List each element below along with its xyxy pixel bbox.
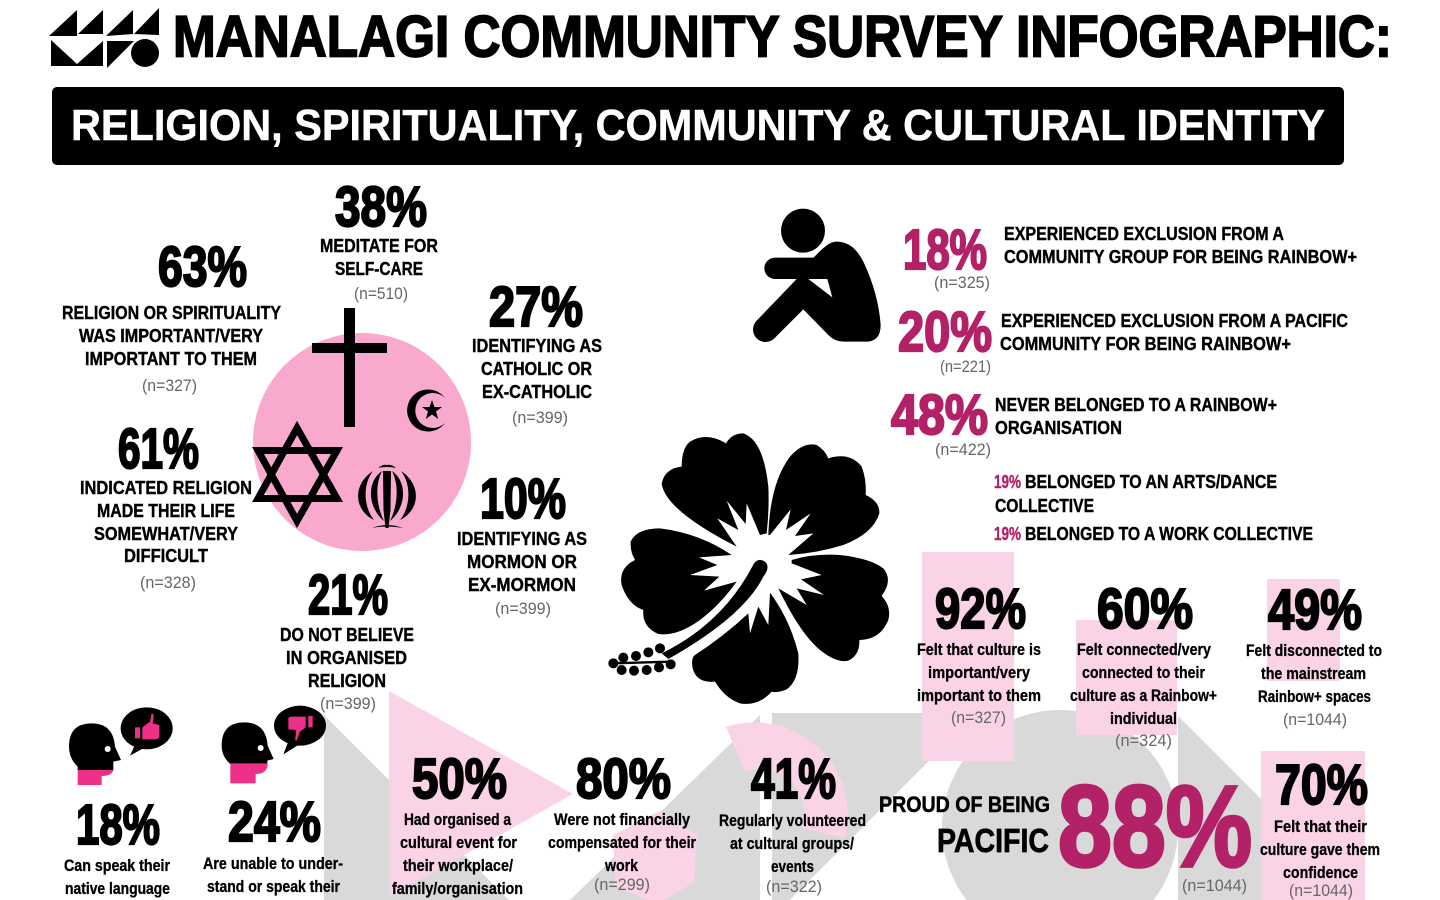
icon: head with thumbs down speech bubble — [222, 706, 326, 783]
stat: 27% catholic: EX-CATHOLIC — [482, 381, 592, 402]
stat: 61% religion difficult: 61% — [118, 417, 199, 481]
stat: 27% catholic: 27% — [489, 275, 583, 339]
stat: 27% catholic: IDENTIFYING AS — [472, 335, 602, 356]
stat: 48% never belonged — [891, 383, 1277, 459]
icon: hibiscus flower — [608, 433, 889, 704]
stat: 92% culture important: important to them — [917, 687, 1041, 705]
stat: 61% religion difficult: MADE THEIR LIFE — [97, 500, 235, 521]
stat: 49% disconnected from Rainbow+ spaces: the mainstream — [1261, 665, 1366, 683]
stat: 19% arts and work collectives: COLLECTIVE — [995, 495, 1094, 516]
stat: 18% excluded from community group: EXPERIENCED EXCLUSION FROM A — [1004, 223, 1284, 244]
stat: 70% culture gave confidence — [1260, 753, 1380, 900]
stat: 80% not compensated: compensated for their — [548, 834, 696, 852]
stat: 80% not compensated: Were not financially — [554, 811, 691, 829]
stat: 20% excluded from Pacific community: COMMUNITY FOR BEING RAINBOW+ — [1000, 333, 1291, 354]
stat: 24% unable to understand or speak: 24% — [228, 790, 321, 854]
stat: 63% religion important — [62, 235, 282, 395]
stat: 61% religion difficult: (n=328) — [140, 573, 196, 592]
stat: 70% culture gave confidence: (n=1044) — [1289, 881, 1353, 900]
stat: 92% culture important: Felt that culture is — [917, 641, 1041, 659]
icon: head with thumbs up speech bubble — [69, 707, 173, 785]
stat: 38% meditate: 38% — [335, 175, 427, 239]
stat: 60% connected to culture: culture as a Rainbow+ — [1070, 687, 1217, 705]
stat: 24% unable to understand or speak: Are unable to under- — [203, 855, 343, 873]
stat: 49% disconnected from Rainbow+ spaces: Felt disconnected to — [1246, 642, 1382, 660]
stat: 10% mormon: EX-MORMON — [468, 574, 576, 595]
stat: 18% speak native language: 18% — [76, 793, 160, 857]
subtitle banner: RELIGION, SPIRITUALITY, COMMUNITY & CULTURAL IDENTITY — [71, 101, 1325, 150]
stat: 20% excluded from Pacific community — [898, 300, 1348, 376]
stat: 27% catholic: (n=399) — [512, 408, 568, 427]
stat: 27% catholic: CATHOLIC OR — [481, 358, 592, 379]
stat: 49% disconnected from Rainbow+ spaces: 49% — [1268, 578, 1362, 642]
stat: 92% culture important: (n=327) — [951, 708, 1006, 727]
stat: 38% meditate: (n=510) — [354, 284, 408, 303]
stat: 18% speak native language: native language — [65, 880, 170, 898]
stat: 19% arts and work collectives — [994, 471, 1313, 544]
stat: 21% no organised religion: (n=399) — [320, 694, 376, 713]
stat: 63% religion important: (n=327) — [142, 376, 197, 395]
stat: 41% volunteered: events — [771, 858, 814, 876]
stat: 21% no organised religion: RELIGION — [308, 670, 386, 691]
stat: 18% speak native language — [64, 793, 170, 898]
stat: 27% catholic — [472, 275, 602, 427]
stat: 49% disconnected from Rainbow+ spaces: (n=1044) — [1283, 710, 1347, 729]
stat: 10% mormon: (n=399) — [495, 599, 551, 618]
stat: 21% no organised religion — [280, 563, 414, 713]
stat: 19% arts and work collectives: 19% — [994, 471, 1021, 492]
stat: 61% religion difficult: INDICATED RELIGION — [80, 477, 252, 498]
stat: 60% connected to culture: individual — [1110, 710, 1177, 728]
stat: 63% religion important: IMPORTANT TO THEM — [85, 348, 257, 369]
stat: 18% excluded from community group: (n=325) — [934, 273, 990, 292]
stat: 50% organised cultural event — [392, 747, 523, 898]
stat: 48% never belonged: (n=422) — [935, 440, 991, 459]
stat: 61% religion difficult — [80, 417, 252, 592]
stat: 61% religion difficult: SOMEWHAT/VERY — [94, 523, 239, 544]
stat: 48% never belonged: 48% — [891, 383, 988, 447]
stat: 19% arts and work collectives: BELONGED TO AN ARTS/DANCE — [1025, 471, 1277, 492]
stat: 10% mormon: MORMON OR — [467, 551, 577, 572]
subtitle banner — [52, 87, 1344, 165]
stat: 18% excluded from community group: 18% — [903, 218, 987, 282]
stat: 41% volunteered — [719, 747, 866, 896]
stat: 18% speak native language: Can speak their — [64, 857, 170, 875]
stat: 92% culture important — [917, 577, 1041, 727]
stat: 80% not compensated: work — [604, 857, 639, 875]
stat: 60% connected to culture — [1070, 577, 1217, 750]
stat: 50% organised cultural event: Had organised a — [404, 811, 512, 829]
stat: 49% disconnected from Rainbow+ spaces — [1246, 578, 1382, 729]
background geometric shapes — [324, 552, 1365, 900]
stat: 50% organised cultural event: cultural event for — [400, 834, 517, 852]
stat: 70% culture gave confidence: 70% — [1275, 753, 1368, 817]
stat: 50% organised cultural event: family/organisation — [392, 880, 523, 898]
stat: 38% meditate — [320, 175, 438, 303]
stat: 88% proud of being Pacific: PACIFIC — [937, 822, 1049, 859]
stat: 41% volunteered: (n=322) — [766, 877, 822, 896]
stat: 21% no organised religion: 21% — [308, 563, 388, 627]
stat: 70% culture gave confidence: Felt that their — [1274, 818, 1368, 836]
stat: 63% religion important: 63% — [158, 235, 247, 299]
stat: 41% volunteered: Regularly volunteered — [719, 812, 866, 830]
stat: 41% volunteered: 41% — [751, 747, 836, 811]
stat: 88% proud of being Pacific: (n=1044) — [1182, 876, 1247, 895]
stat: 20% excluded from Pacific community: EXPERIENCED EXCLUSION FROM A PACIFIC — [1001, 310, 1348, 331]
stat: 70% culture gave confidence: confidence — [1283, 864, 1358, 882]
stat: 20% excluded from Pacific community: 20% — [898, 300, 992, 364]
icon: Manalagi logo — [49, 8, 159, 68]
stat: 48% never belonged: NEVER BELONGED TO A RAINBOW+ — [995, 394, 1277, 415]
stat: 60% connected to culture: 60% — [1097, 577, 1193, 641]
stat: 19% arts and work collectives: 19% — [994, 523, 1021, 544]
stat: 38% meditate: MEDITATE FOR — [320, 235, 438, 256]
icon: religious symbols circle — [253, 308, 471, 551]
stat: 88% proud of being Pacific: 88% — [1058, 763, 1252, 891]
stat: 60% connected to culture: connected to their — [1082, 664, 1205, 682]
stat: 38% meditate: SELF-CARE — [335, 258, 423, 279]
stat: 18% excluded from community group — [903, 218, 1357, 292]
icon: seated person — [753, 209, 881, 342]
stat: 21% no organised religion: DO NOT BELIEVE — [280, 624, 414, 645]
stat: 61% religion difficult: DIFFICULT — [124, 545, 209, 566]
stat: 41% volunteered: at cultural groups/ — [730, 835, 854, 853]
stat: 21% no organised religion: IN ORGANISED — [286, 647, 407, 668]
stat: 63% religion important: RELIGION OR SPIRITUALITY — [62, 302, 282, 323]
stat: 80% not compensated: (n=299) — [594, 875, 650, 894]
stat: 20% excluded from Pacific community: (n=221) — [940, 357, 991, 376]
stat: 24% unable to understand or speak: stand or speak their — [207, 878, 340, 896]
stat: 88% proud of being Pacific: PROUD OF BEING — [879, 792, 1050, 817]
stat: 10% mormon: IDENTIFYING AS — [457, 528, 587, 549]
stat: 50% organised cultural event: 50% — [412, 747, 507, 811]
stat: 70% culture gave confidence: culture gave them — [1260, 841, 1380, 859]
stat: 10% mormon — [457, 467, 587, 618]
stat: 92% culture important: important/very — [928, 664, 1031, 682]
stat: 19% arts and work collectives: BELONGED TO A WORK COLLECTIVE — [1025, 523, 1313, 544]
stat: 60% connected to culture: Felt connected/very — [1077, 641, 1212, 659]
stat: 18% excluded from community group: COMMUNITY GROUP FOR BEING RAINBOW+ — [1004, 246, 1357, 267]
stat: 60% connected to culture: (n=324) — [1115, 731, 1172, 750]
stat: 80% not compensated: 80% — [576, 747, 671, 811]
stat: 10% mormon: 10% — [480, 467, 566, 531]
stat: 63% religion important: WAS IMPORTANT/VERY — [79, 325, 264, 346]
stat: 80% not compensated — [548, 747, 696, 894]
stat: 24% unable to understand or speak — [203, 790, 343, 896]
stat: 92% culture important: 92% — [935, 577, 1026, 641]
stat: 49% disconnected from Rainbow+ spaces: Rainbow+ spaces — [1258, 688, 1371, 706]
stat: 48% never belonged: ORGANISATION — [995, 417, 1122, 438]
stat: 50% organised cultural event: their workplace/ — [403, 857, 513, 875]
stat: 88% proud of being Pacific — [879, 763, 1252, 895]
